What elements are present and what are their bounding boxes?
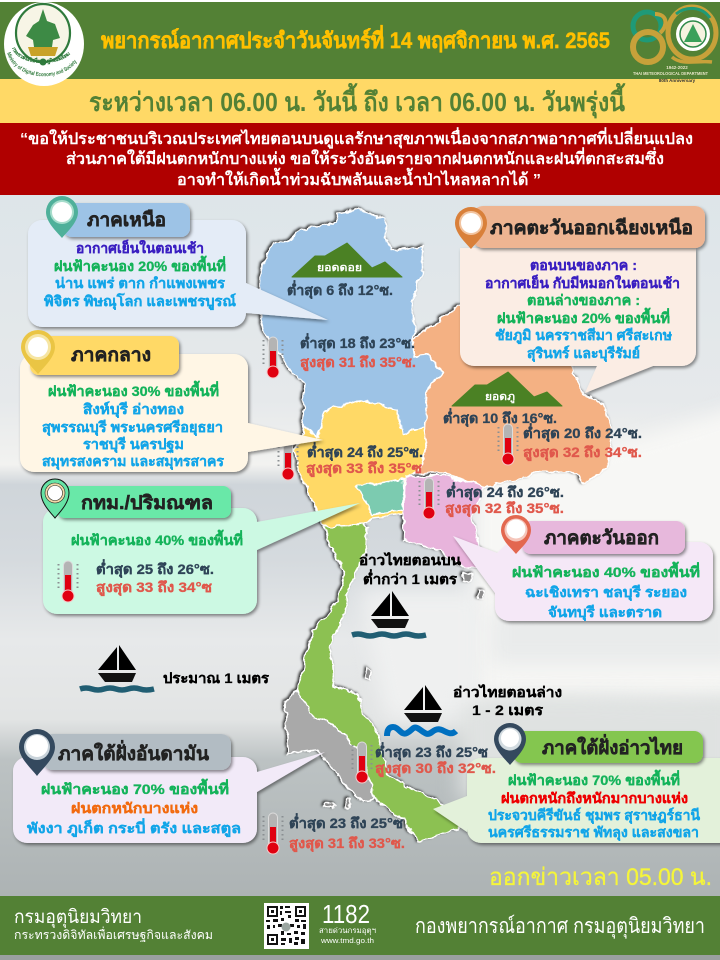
panel: northeast: สุรินทร์ และบุรีรัมย์ — [527, 345, 640, 362]
icon: 80th anniversary logo: 1942-2022 — [666, 65, 688, 70]
temperatures south gulf: สูงสุด 30 ถึง 32°ซ. — [375, 760, 496, 777]
icon: ministry logo — [4, 2, 84, 86]
footer band: 1182 — [322, 899, 370, 929]
panel: Bangkok and vicinity: ฝนฟ้าคะนอง 40% ของพื้นที่ — [71, 529, 243, 548]
temperatures south gulf: ต่ำสุด 23 ถึง 25°ซ — [375, 742, 489, 761]
icon: 80th anniversary logo — [633, 7, 716, 83]
temperatures northeast: ต่ำสุด 10 ถึง 16°ซ. — [443, 408, 557, 427]
boat: upper gulf wave: อ่าวไทยตอนบน — [359, 551, 461, 568]
temperatures south Andaman — [264, 813, 405, 854]
warning banner — [0, 123, 720, 195]
panel: south gulf: ประจวบคีรีขันธ์ ชุมพร สุราษฎร์ธานี — [488, 807, 700, 824]
panel: Bangkok and vicinity: ต่ำสุด 25 ถึง 26°ซ. — [96, 559, 214, 578]
panel: south Andaman: พังงา ภูเก็ต กระบี่ ตรัง และสตูล — [27, 818, 241, 837]
footer band: สายด่วนกรมอุตุฯ — [319, 926, 376, 935]
region: east (pink) — [403, 475, 486, 567]
panel: north — [28, 196, 328, 327]
temperatures east: สูงสุด 32 ถึง 35°ซ. — [445, 500, 564, 517]
panel: central — [20, 330, 323, 472]
panel: south Andaman: ภาคใต้ฝั่งอันดามัน — [58, 740, 209, 765]
panel: east: ฉะเชิงเทรา ชลบุรี ระยอง — [525, 584, 687, 601]
boat: lower gulf wave — [387, 683, 562, 736]
panel: south Andaman — [13, 729, 325, 843]
temperatures south Andaman: สูงสุด 31 ถึง 33°ซ. — [289, 835, 405, 852]
panel: north: น่าน แพร่ ตาก กำแพงเพชร — [55, 275, 225, 291]
warning banner: “ขอให้ประชาชนบริเวณประเทศไทยตอนบนดูแลรักษาสุขภาพเนื่องจากสภาพอากาศที่เปลี่ยนแปลง — [20, 127, 693, 150]
boat: Andaman sea wave — [80, 645, 269, 690]
boat: lower gulf wave: อ่าวไทยตอนล่าง — [453, 683, 562, 700]
region: north (blue) — [260, 208, 442, 437]
temperatures north — [264, 280, 416, 378]
boat: Andaman sea wave: ประมาณ 1 เมตร — [163, 670, 269, 686]
time strip — [0, 79, 720, 123]
panel: south gulf: ฝนฟ้าคะนอง 70% ของพื้นที่ — [508, 769, 680, 788]
panel: south Andaman: ฝนฟ้าคะนอง 70% ของพื้นที่ — [41, 778, 229, 797]
footer band: www.tmd.go.th — [320, 938, 374, 945]
panel: south gulf: ภาคใต้ฝั่งอ่าวไทย — [542, 734, 683, 759]
footer band — [0, 896, 720, 960]
panel: south gulf: ฝนตกหนักถึงหนักมากบางแห่ง — [501, 790, 688, 806]
boat: upper gulf wave: ต่ำกว่า 1 เมตร — [363, 569, 458, 587]
region: northeast (orange) — [412, 300, 612, 487]
region: south gulf (green) — [297, 520, 470, 842]
region: Bangkok (teal) — [357, 479, 404, 515]
panel: northeast: ตอนล่างของภาค : — [527, 292, 640, 308]
footer band: กรมอุตุนิยมวิทยา — [14, 907, 142, 929]
panel: east: ฝนฟ้าคะนอง 40% ของพื้นที่ — [512, 561, 700, 580]
footer band: กระทรวงดิจิทัลเพื่อเศรษฐกิจและสังคม — [14, 926, 213, 942]
panel: northeast: ฝนฟ้าคะนอง 20% ของพื้นที่ — [497, 307, 670, 326]
panel: central: ราชบุรี นครปฐม — [83, 436, 184, 454]
mountain: Doi peak — [292, 243, 402, 277]
panel: central: สุพรรณบุรี พระนครศรีอยุธยา — [42, 419, 223, 436]
icon: ministry logo: Ministry of Digital Economy and Society — [7, 52, 77, 76]
temperatures north: ต่ำสุด 18 ถึง 23°ซ. — [300, 333, 415, 352]
panel: north: พิจิตร พิษณุโลก และเพชรบูรณ์ — [44, 292, 236, 310]
panel: east: จันทบุรี และตราด — [548, 604, 662, 621]
panel: central: ภาคกลาง — [71, 345, 151, 366]
boat: upper gulf wave — [352, 551, 461, 636]
temperatures northeast — [443, 408, 642, 465]
temperatures east — [420, 478, 564, 519]
region: south Andaman (gray) — [285, 690, 373, 802]
panel: north: ฝนฟ้าคะนอง 20% ของพื้นที่ — [54, 255, 226, 274]
panel: northeast — [455, 206, 705, 393]
QR code — [264, 903, 309, 949]
panel: central: สมุทรสงคราม และสมุทรสาคร — [42, 453, 224, 470]
region: islands — [324, 572, 485, 808]
header band — [0, 2, 720, 79]
region: central (yellow) — [295, 400, 425, 527]
panel: north: อากาศเย็นในตอนเช้า — [76, 239, 204, 256]
time strip: ระหว่างเวลา 06.00 น. วันนี้ ถึง เวลา 06.00 น. วันพรุ่งนี้ — [89, 82, 626, 119]
panel: south Andaman: ฝนตกหนักบางแห่ง — [71, 800, 198, 816]
background: misty mountains — [0, 190, 720, 900]
temperatures central: ต่ำสุด 24 ถึง 25°ซ. — [307, 442, 423, 461]
warning banner: ส่วนภาคใต้มีฝนตกหนักบางแห่ง ขอให้ระวังอันตรายจากฝนตกหนักและฝนที่ตกสะสมซึ่ง — [66, 147, 664, 168]
temperatures northeast: สูงสุด 32 ถึง 34°ซ. — [523, 444, 642, 461]
temperatures central — [278, 439, 423, 480]
temperatures north: ต่ำสุด 6 ถึง 12°ซ. — [287, 280, 393, 299]
panel: northeast: ชัยภูมิ นครราชสีมา ศรีสะเกษ — [495, 327, 672, 344]
mountain: Phu peak: ยอดภู — [485, 392, 515, 404]
temperatures south gulf — [352, 742, 496, 783]
temperatures east: ต่ำสุด 24 ถึง 26°ซ. — [446, 482, 564, 501]
panel: central: สิงห์บุรี อ่างทอง — [83, 401, 184, 418]
panel: south gulf — [433, 723, 720, 843]
panel: central: ฝนฟ้าคะนอง 30% ของพื้นที่ — [48, 380, 219, 399]
mountain: Doi peak: ยอดดอย — [317, 263, 362, 274]
panel: Bangkok and vicinity: สูงสุด 33 ถึง 34°ซ — [96, 579, 213, 596]
temperatures northeast: ต่ำสุด 20 ถึง 24°ซ. — [523, 423, 642, 442]
mountain: Phu peak — [452, 372, 562, 406]
header title: พยากรณ์อากาศประจำวันจันทร์ที่ 14 พฤศจิกายน พ.ศ. 2565 — [101, 24, 610, 53]
warning banner: อาจทำให้เกิดน้ำท่วมฉับพลันและน้ำป่าไหลหลากได้ ” — [177, 167, 541, 189]
boat: lower gulf wave: 1 - 2 เมตร — [472, 702, 544, 718]
temperatures central: สูงสุด 33 ถึง 35°ซ — [306, 460, 423, 477]
map of Thailand — [260, 208, 612, 842]
panel: northeast: ตอนบนของภาค : — [530, 257, 637, 273]
icon: 80th anniversary logo: THAI METEOROLOGICAL DEPARTMENT — [633, 71, 708, 76]
panel: east: ภาคตะวันออก — [544, 528, 659, 549]
temperatures north: สูงสุด 31 ถึง 35°ซ. — [300, 354, 416, 371]
icon: ministry logo: กระทรวงดิจิทัลเพื่อเศรษฐกิจและสังคม — [12, 47, 70, 64]
panel: northeast: อากาศเย็น กับมีหมอกในตอนเช้า — [485, 274, 680, 291]
temperatures south Andaman: ต่ำสุด 23 ถึง 25°ซ — [289, 813, 404, 832]
panel: Bangkok and vicinity: กทม./ปริมณฑล — [81, 493, 213, 514]
panel: east — [453, 515, 713, 621]
panel: northeast: ภาคตะวันออกเฉียงเหนือ — [490, 217, 693, 239]
panel: south gulf: นครศรีธรรมราช พัทลุง และสงขลา — [488, 824, 699, 841]
issue time: ออกข่าวเวลา 05.00 น. — [489, 864, 712, 891]
panel: north: ภาคเหนือ — [87, 209, 166, 231]
panel: Bangkok and vicinity — [41, 479, 360, 614]
icon: 80th anniversary logo: 80th Anniversary — [659, 78, 696, 83]
